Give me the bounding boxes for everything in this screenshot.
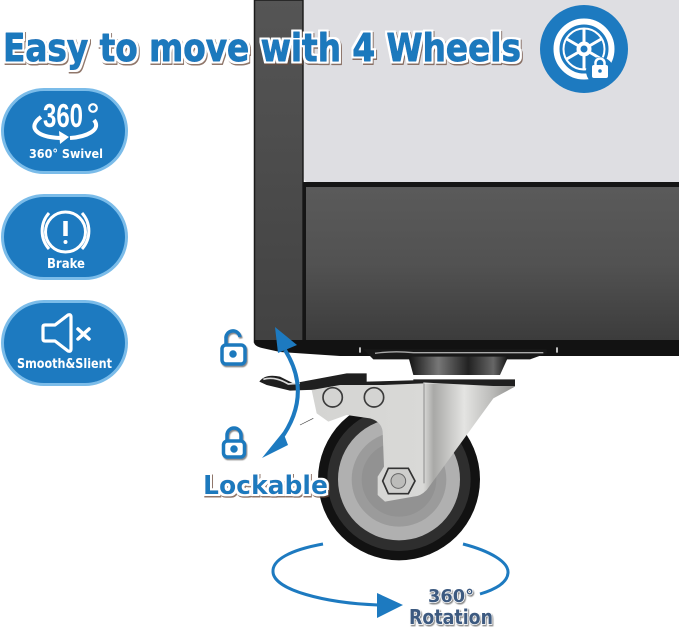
badge: brake [2, 196, 126, 278]
icon: brake warning [42, 212, 89, 252]
brake lever [259, 373, 423, 391]
label: Brake [47, 257, 85, 272]
wheel hub [338, 418, 460, 540]
icon: unlocked padlock [222, 331, 245, 364]
cabinet base band [254, 340, 679, 356]
arrow: 360 rotation [273, 544, 508, 618]
badge: smooth and silent [2, 302, 126, 384]
title: Easy to move with 4 Wheels [3, 26, 521, 70]
label: lockable: Lockable [203, 471, 328, 501]
swivel neck [408, 357, 508, 375]
label: 360° Swivel [29, 147, 103, 161]
label: 360 rotation [409, 586, 493, 627]
brake rivets [323, 388, 384, 407]
cabinet corner post [254, 0, 303, 342]
swivel bracket [312, 383, 515, 502]
label: 360 rotation: 360° [428, 586, 474, 607]
caster wheel assembly [259, 347, 557, 560]
mounting plate [363, 349, 547, 359]
cabinet light door panel [304, 0, 679, 182]
badge: 360 swivel [2, 90, 126, 172]
cabinet [254, 0, 679, 356]
360 numeral: 360 [43, 97, 83, 134]
arrow: lock lever double arrow [262, 327, 298, 458]
wheel tyre [318, 398, 480, 560]
degree mark [89, 104, 97, 112]
icon: locked padlock [224, 428, 244, 457]
label: Smooth&Slient [17, 357, 112, 372]
swivel arrow [34, 117, 96, 138]
icon: muted speaker [43, 315, 89, 351]
icon: locked wheel badge [540, 5, 628, 93]
axle nut [383, 468, 415, 494]
cabinet dark lower panel [306, 187, 679, 340]
